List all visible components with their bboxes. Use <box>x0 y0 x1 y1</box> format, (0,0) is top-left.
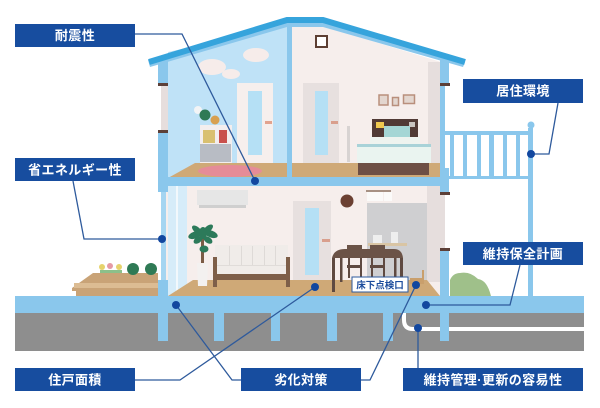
dining table <box>332 245 403 292</box>
pendant light <box>366 190 392 201</box>
label: seismic: 耐震性 <box>55 28 95 43</box>
floor lamp <box>347 126 350 162</box>
label: dwelling area <box>15 368 135 391</box>
potted plant <box>187 223 219 286</box>
lower walls <box>158 186 449 296</box>
door <box>303 83 339 163</box>
bed <box>357 119 431 175</box>
label: maintenance plan: 維持保全計画 <box>483 246 563 262</box>
door <box>293 201 331 281</box>
connector dots <box>158 150 535 332</box>
label: maintenance plan <box>463 242 583 265</box>
lower room <box>166 186 445 296</box>
garden <box>72 263 158 296</box>
kitchen wall <box>367 203 427 282</box>
shrub <box>450 273 491 296</box>
label: ease of maintenance <box>403 368 583 391</box>
roof <box>148 20 465 67</box>
label: underfloor inspection hatch: 床下点検口 <box>356 280 404 292</box>
rug <box>198 165 262 177</box>
label: energy <box>15 158 135 181</box>
house illustration <box>15 20 584 351</box>
label: dwelling area: 住戸面積 <box>48 372 102 388</box>
shelf with plant and items <box>194 106 232 163</box>
upper right room <box>291 26 441 178</box>
wall pale stripe <box>161 84 168 132</box>
balcony <box>445 122 534 296</box>
ground and foundation <box>15 296 584 351</box>
label: ease of maintenance: 維持管理·更新の容易性 <box>424 372 562 388</box>
upper wood floor <box>168 163 449 178</box>
floor <box>168 280 440 296</box>
label: living environment: 居住環境 <box>496 84 550 98</box>
clouds <box>198 48 269 79</box>
label: living environment <box>463 79 583 103</box>
sofa <box>213 245 290 287</box>
wall brackets <box>158 83 450 251</box>
walls and slab <box>158 24 449 186</box>
picture frames <box>379 95 414 106</box>
label: underfloor inspection hatch <box>352 277 408 292</box>
label: seismic <box>15 24 135 47</box>
label: energy: 省エネルギー性 <box>28 162 122 178</box>
air conditioner <box>197 190 248 208</box>
chair beside hatch <box>410 270 424 284</box>
wall clock <box>340 194 354 208</box>
window <box>316 36 327 47</box>
connector lines <box>73 34 558 380</box>
upper left room <box>168 26 287 178</box>
label: deterioration <box>241 368 361 391</box>
label: deterioration: 劣化対策 <box>274 372 328 388</box>
door <box>237 83 273 163</box>
